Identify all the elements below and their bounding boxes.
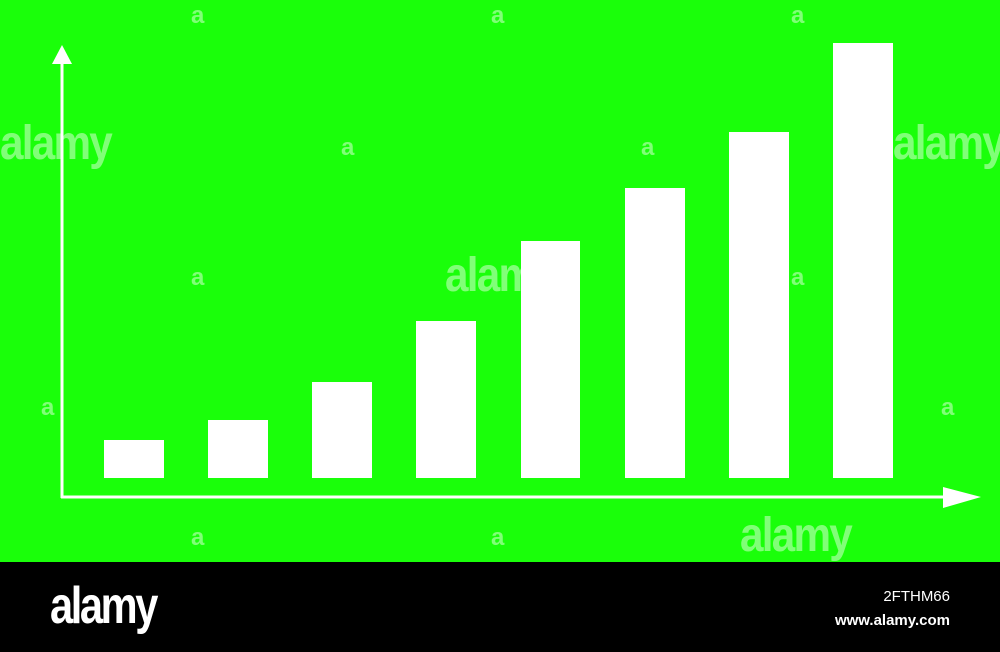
footer id text [835, 588, 950, 629]
watermarks: a [791, 2, 804, 29]
watermarks: a [491, 2, 504, 29]
watermarks: a [491, 524, 504, 551]
watermarks: alamy [740, 509, 851, 562]
watermarks: a [191, 2, 204, 29]
footer id text: 2FTHM66 [883, 588, 950, 605]
footer id text: www.alamy.com [835, 612, 950, 629]
watermarks: a [191, 264, 204, 291]
watermarks: a [191, 524, 204, 551]
footer logo: alamy [50, 577, 156, 635]
watermarks: a [641, 134, 654, 161]
bars [104, 43, 893, 478]
footer bar [0, 562, 1000, 652]
watermarks: alamy [445, 249, 556, 302]
watermarks: alamy [0, 117, 111, 170]
watermarks: a [341, 134, 354, 161]
y axis arrow [52, 45, 72, 498]
watermarks: a [791, 264, 804, 291]
watermarks: a [41, 394, 54, 421]
watermarks: a [941, 394, 954, 421]
x axis arrow [61, 487, 981, 508]
